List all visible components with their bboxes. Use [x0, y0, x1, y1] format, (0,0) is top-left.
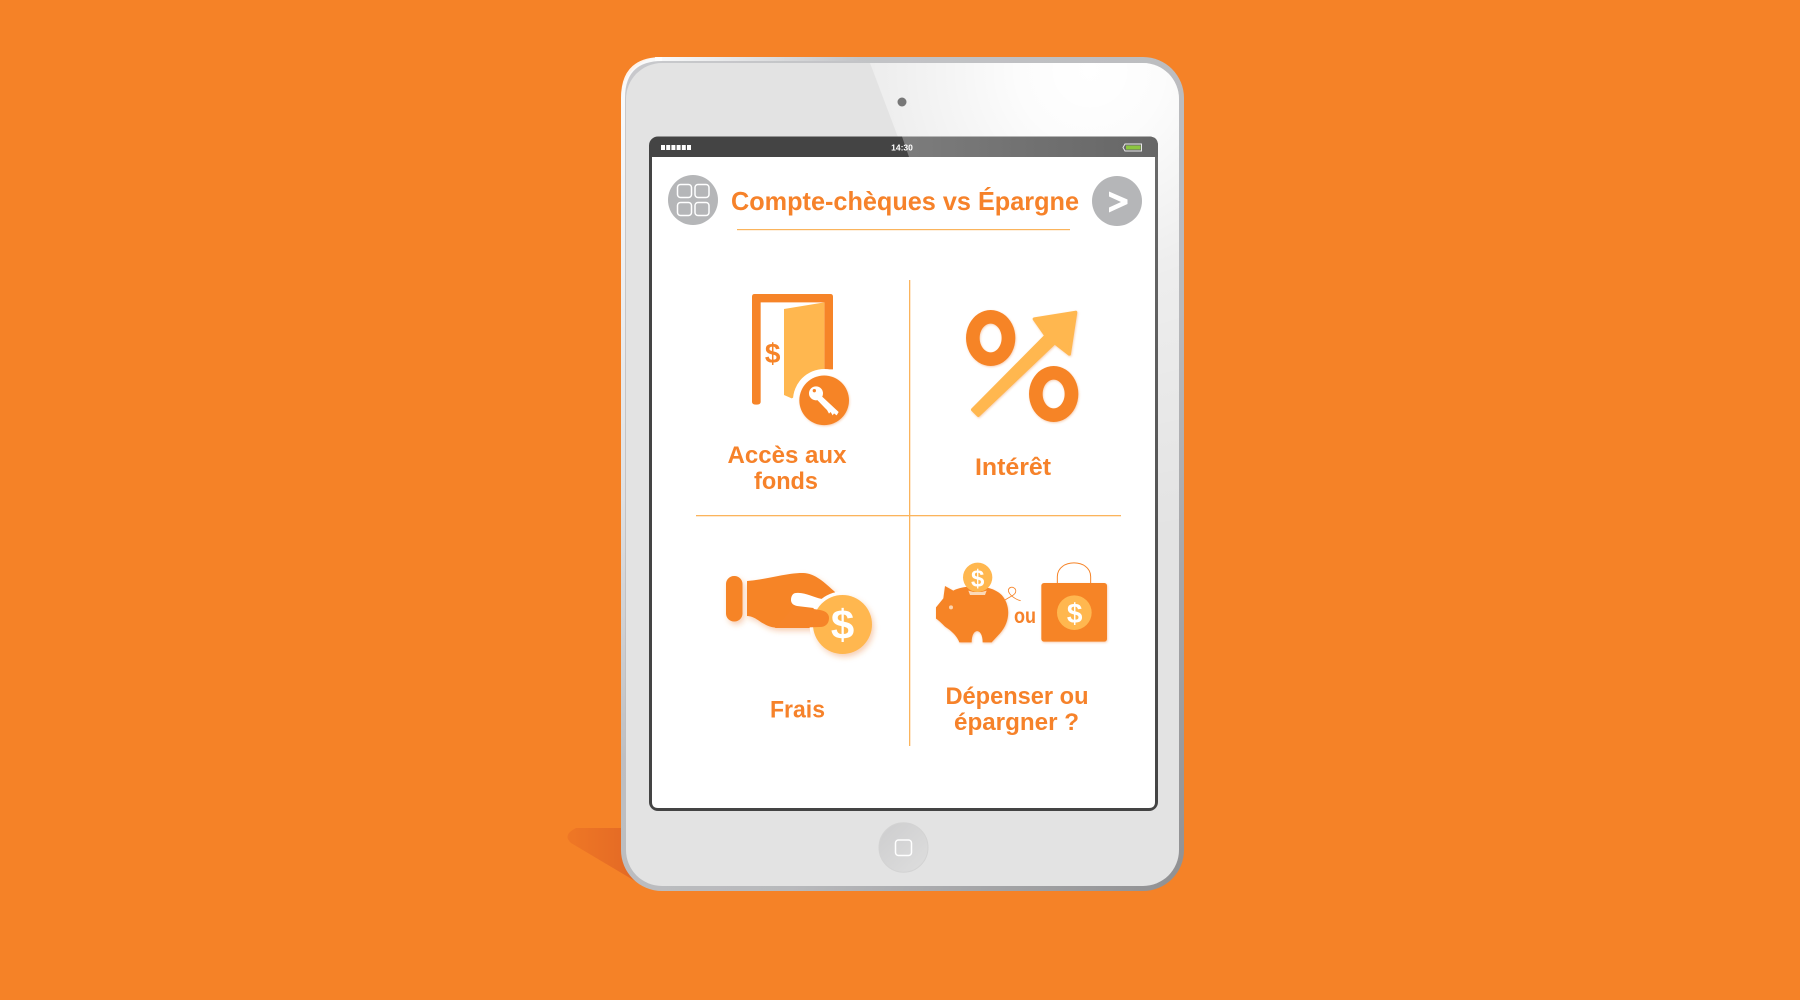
- rim highlight left: [623, 59, 662, 800]
- icon: piggy bank: $: [971, 565, 984, 592]
- screen right border: [1155, 157, 1158, 797]
- cell: spend or save: [936, 563, 1107, 736]
- horizontal divider: [696, 515, 1121, 516]
- cell: fees: [726, 573, 876, 724]
- home button: [879, 823, 928, 872]
- clock: 14:30: [891, 142, 913, 152]
- label: Dépenser ou épargner ?: épargner ?: [954, 709, 1079, 736]
- rim highlight top: [655, 57, 870, 61]
- cell: access to funds: [728, 294, 856, 495]
- icon: door with key: [752, 294, 856, 432]
- tablet device: [621, 57, 1184, 891]
- icon: hand with coin: [726, 573, 876, 658]
- battery: [1123, 144, 1142, 151]
- menu button icon: [668, 175, 718, 225]
- label: Accès aux fonds: Accès aux: [728, 442, 847, 469]
- icon: percent with arrow: [966, 310, 1078, 422]
- label: Frais: Frais: [770, 696, 825, 724]
- title: Compte-chèques vs Épargne: [731, 186, 1079, 216]
- screen frame: [649, 136, 1158, 811]
- glass glare: [870, 63, 1179, 324]
- icon: piggy bank: [936, 563, 1021, 642]
- screen white area: [652, 157, 1155, 808]
- label: Accès aux fonds: [728, 442, 847, 495]
- signal dots: [661, 145, 691, 150]
- icon: shopping bag: [1041, 563, 1107, 642]
- camera: [898, 98, 906, 106]
- connector word: ou: ou: [1014, 604, 1036, 628]
- vertical divider: [909, 280, 910, 746]
- cell: interest: [966, 310, 1078, 481]
- icon: hand with coin: $: [831, 601, 854, 648]
- label: Intérêt: Intérêt: [975, 454, 1051, 481]
- status bar: [661, 136, 1158, 157]
- label: Dépenser ou épargner ?: Dépenser ou: [946, 683, 1088, 710]
- tablet shadow: [567, 828, 640, 884]
- label: Dépenser ou épargner ?: [946, 683, 1088, 736]
- icon: door with key: $: [765, 338, 781, 369]
- icon: shopping bag: $: [1067, 598, 1083, 629]
- tablet outer rim: [621, 57, 1184, 891]
- tablet face: [626, 63, 1179, 886]
- next button icon: [1092, 176, 1142, 226]
- label: Accès aux fonds: fonds: [754, 468, 818, 495]
- title underline: [737, 229, 1070, 230]
